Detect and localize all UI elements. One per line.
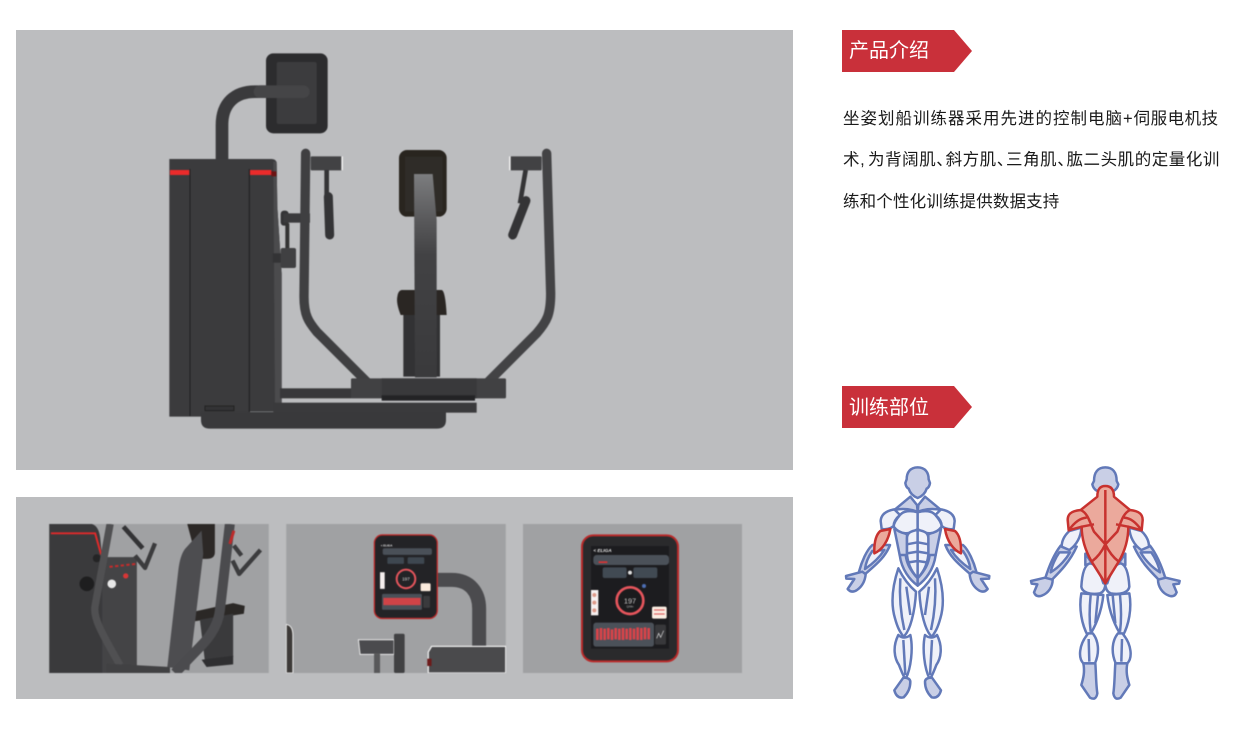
photo: display close-up: 197 (624, 596, 636, 605)
photo: machine close-up (48, 523, 269, 674)
text: product description: 坐姿划船训练器采用先进的控制电脑+伺服电机技 (843, 110, 1219, 128)
figure: back muscle map (1030, 466, 1181, 700)
screen back (266, 53, 328, 133)
text: product description: 练和个性化训练提供数据支持 (843, 193, 1059, 211)
small screen: 197 (402, 577, 410, 582)
photo: display close-up: Q/Min (626, 605, 634, 609)
photo: display close-up (522, 524, 742, 674)
illustration: rowing machine (168, 52, 556, 430)
heading: 训练部位 (842, 386, 972, 428)
tower (169, 159, 282, 417)
text: product description (843, 110, 1220, 211)
text: product description: 术,为背阔肌、斜方肌、三角肌、肱二头肌的定量化训 (843, 151, 1220, 169)
photo: display close-up: < ELIGA (593, 548, 612, 553)
heading: 产品介绍 (842, 30, 972, 72)
figure: front muscle map (844, 466, 991, 699)
heading: 训练部位: 训练部位 (849, 397, 929, 419)
small screen: < ELIGA (381, 543, 393, 547)
handles (311, 156, 343, 170)
small screen (374, 535, 437, 618)
side frames (304, 153, 370, 385)
heading: 产品介绍: 产品介绍 (849, 40, 929, 62)
arm (222, 92, 302, 160)
base (273, 403, 477, 413)
panel: main product photo (16, 30, 793, 470)
pivots (281, 211, 289, 226)
panel: detail photos (16, 497, 793, 699)
crossbar (351, 378, 506, 398)
seat and back pad (399, 150, 447, 217)
photo: display on arm (286, 524, 506, 674)
